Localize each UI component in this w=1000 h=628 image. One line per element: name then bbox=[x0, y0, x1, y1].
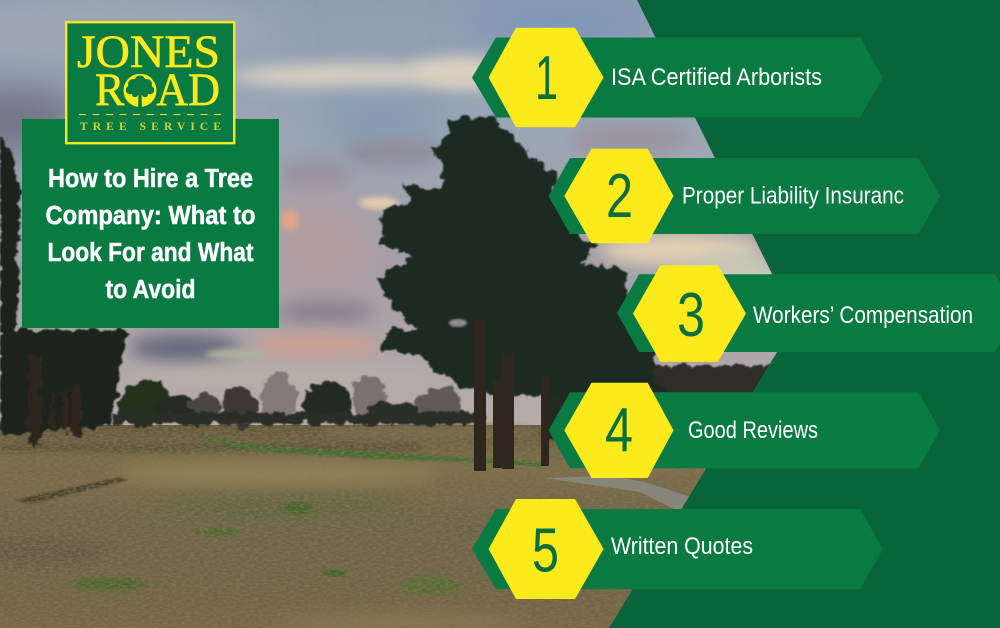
ground bbox=[0, 425, 1000, 628]
number 3: 3 bbox=[677, 281, 705, 350]
ribbon 1 bbox=[472, 38, 883, 118]
label 1: ISA Certified Arborists bbox=[611, 64, 822, 91]
hexagon 2 bbox=[564, 149, 674, 243]
logo tree emblem bbox=[124, 74, 156, 107]
number 2: 2 bbox=[606, 162, 633, 231]
list item 1 bbox=[472, 28, 883, 127]
number 5: 5 bbox=[532, 516, 559, 586]
list item 5 bbox=[472, 499, 883, 599]
logo: Jones Road Tree Service bbox=[66, 22, 234, 143]
number 1: 1 bbox=[535, 44, 558, 113]
list item 2 bbox=[548, 149, 940, 243]
sky clouds bbox=[0, 0, 785, 387]
hexagon 5 bbox=[489, 499, 604, 599]
title text: Company: What to bbox=[46, 202, 256, 230]
gap in pine canopy bbox=[449, 319, 467, 327]
ribbon 3 bbox=[617, 274, 1000, 352]
ribbon 2 bbox=[548, 158, 940, 234]
left tree bbox=[0, 135, 128, 445]
right tree mass bbox=[545, 365, 780, 445]
label 5: Written Quotes bbox=[611, 533, 753, 560]
title text: Look For and What bbox=[48, 239, 254, 267]
hexagon 1 bbox=[489, 28, 604, 127]
title text bbox=[46, 165, 256, 304]
title text: How to Hire a Tree bbox=[48, 165, 253, 193]
logo tagline: TREE SERVICE bbox=[80, 121, 221, 133]
logo word ROAD: ROAD bbox=[95, 64, 220, 116]
ribbon 4 bbox=[548, 392, 940, 468]
distant tree line bbox=[115, 374, 485, 430]
label 2: Proper Liability Insuranc bbox=[682, 182, 904, 210]
logo dashed rule bbox=[79, 114, 221, 116]
hexagon 4 bbox=[564, 383, 674, 478]
title panel bbox=[22, 119, 279, 328]
grass patches bbox=[0, 424, 545, 628]
footpath bbox=[545, 476, 700, 512]
logo word JONES: JONES bbox=[77, 26, 220, 78]
grass texture bbox=[0, 425, 1000, 628]
hexagon 3 bbox=[633, 265, 746, 362]
list item 4 bbox=[548, 383, 940, 478]
list item 3 bbox=[617, 265, 1000, 362]
title text: to Avoid bbox=[106, 276, 196, 304]
sky bbox=[0, 0, 1000, 440]
number 4: 4 bbox=[605, 396, 633, 465]
pine trunks bbox=[474, 320, 549, 471]
tall pine tree bbox=[377, 117, 655, 471]
ribbon 5 bbox=[472, 509, 883, 589]
label 4: Good Reviews bbox=[688, 417, 818, 444]
dark green diagonal panel bbox=[609, 0, 1000, 628]
